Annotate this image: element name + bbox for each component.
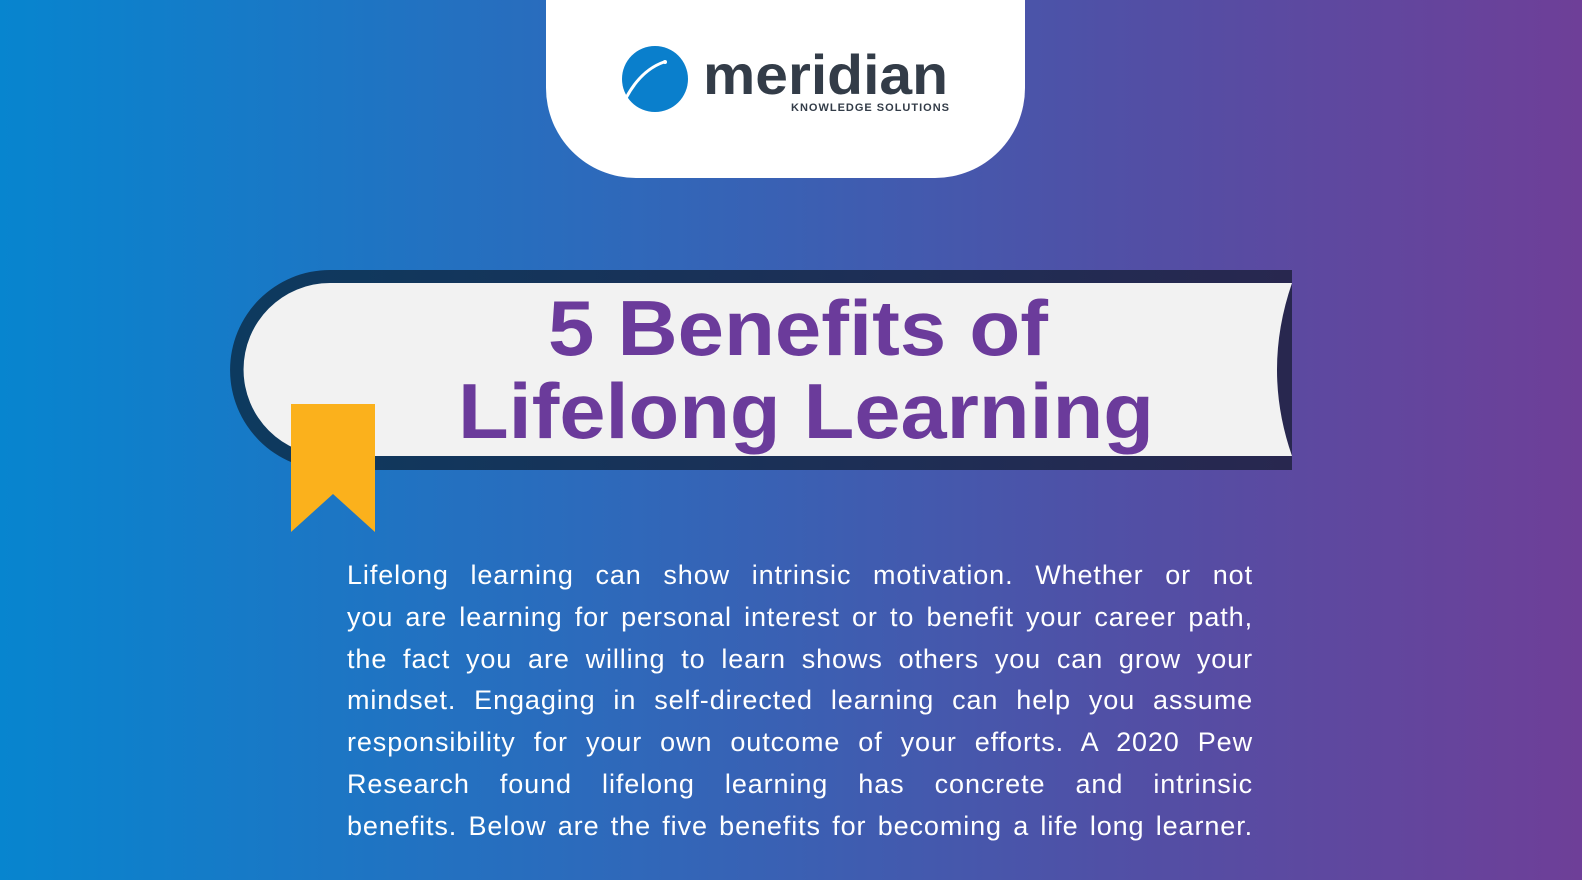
intro paragraph: Research found lifelong learning has concrete and intrinsic [347,769,1253,799]
intro paragraph: you are learning for personal interest or to benefit your career path, [347,602,1253,632]
intro paragraph: Lifelong learning can show intrinsic motivation. Whether or not [347,560,1253,590]
title: 5 Benefits of [548,284,1049,372]
icon: bookmark ribbon [291,404,375,532]
title [458,284,1154,455]
intro paragraph [347,560,1253,841]
logo [622,43,949,114]
title banner [230,270,1292,532]
title: Lifelong Learning [458,367,1154,455]
logo panel [546,0,1025,178]
intro paragraph: benefits. Below are the five benefits for becoming a life long learner. [347,811,1253,841]
intro paragraph: responsibility for your own outcome of your efforts. A 2020 Pew [347,727,1253,757]
intro paragraph: the fact you are willing to learn shows others you can grow your [347,644,1253,674]
wordmark: meridian [703,43,948,106]
intro paragraph: mindset. Engaging in self-directed learning can help you assume [347,685,1253,715]
icon: meridian globe [622,46,688,112]
banner shape [230,270,1292,470]
wordmark: KNOWLEDGE SOLUTIONS [791,102,949,114]
